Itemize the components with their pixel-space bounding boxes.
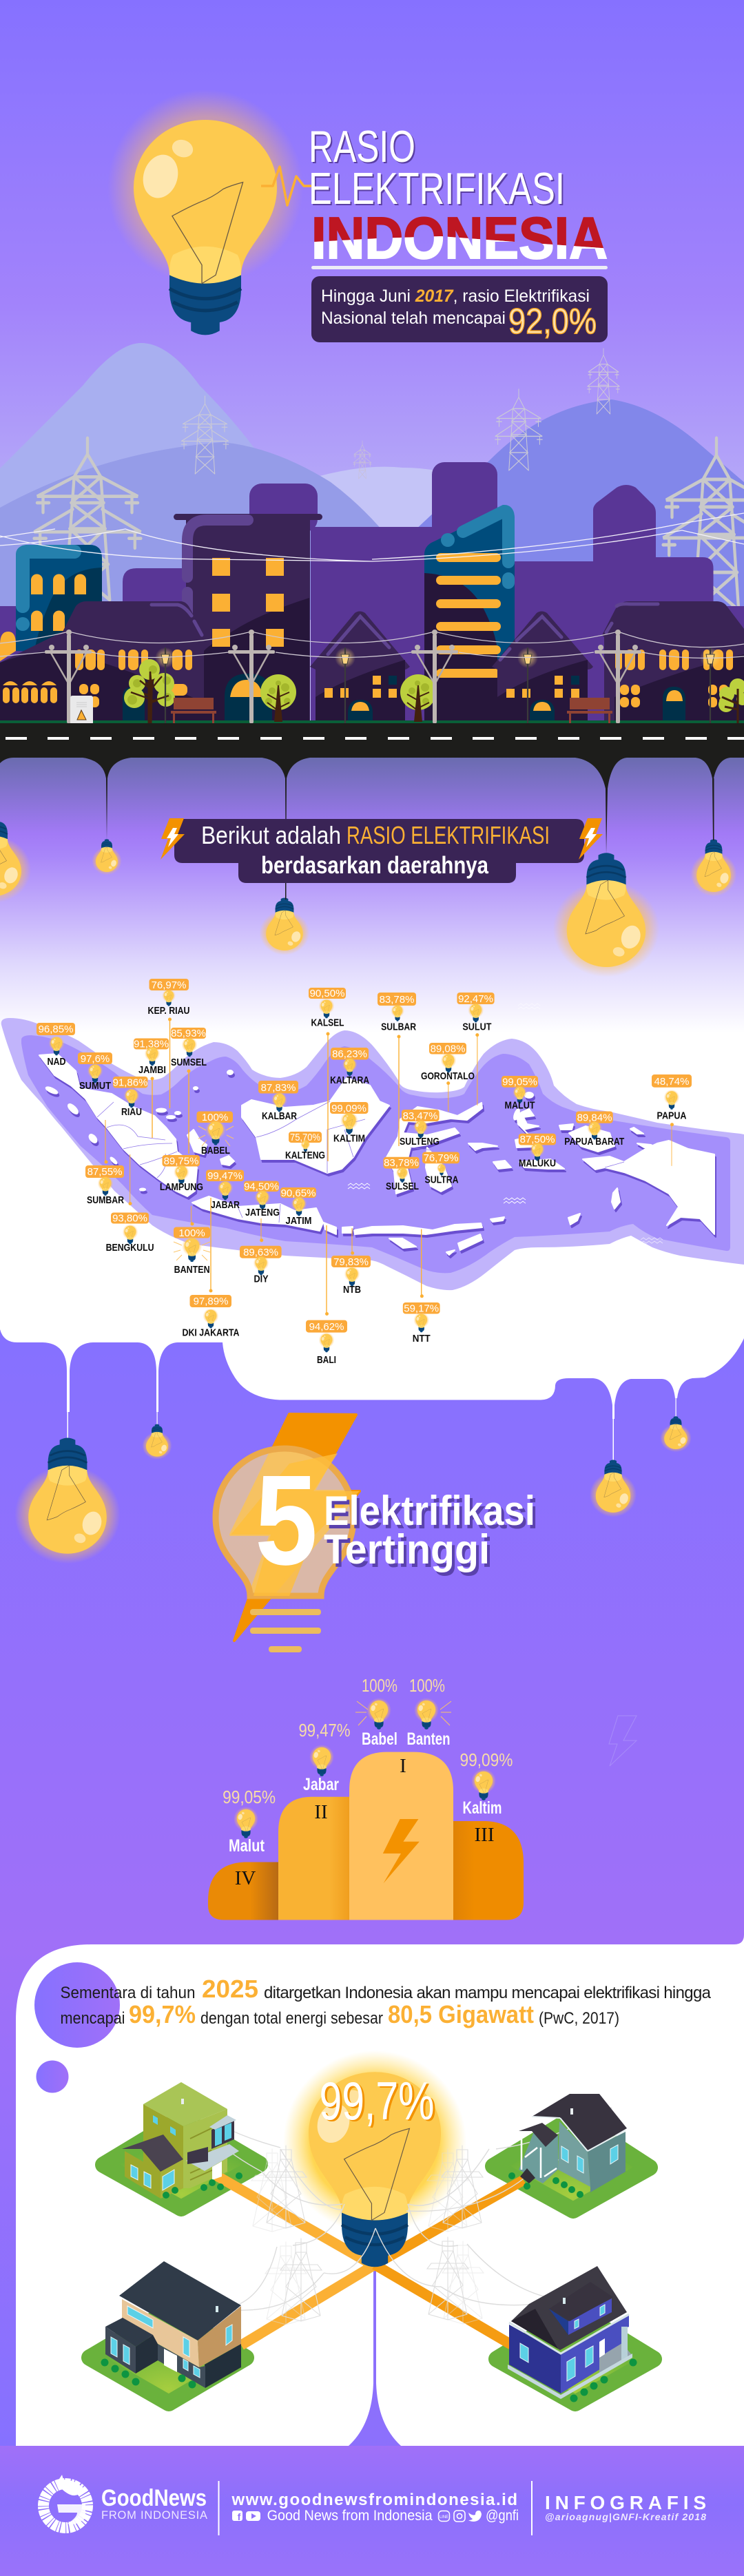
region: KEP. RIAU: KEP. RIAU <box>147 1005 190 1017</box>
footer: GoodNews wordmark: FROM INDONESIA <box>101 2509 207 2522</box>
decoration: thought circles <box>34 1962 120 2092</box>
region: JATIM: 90,65% <box>281 1187 316 1199</box>
street: high voltage wires <box>0 513 744 561</box>
region: SULBAR <box>378 993 416 1146</box>
region: PAPUA <box>652 1074 692 1166</box>
podium: Kaltim <box>460 1749 513 1818</box>
region: SULBAR: SULBAR <box>381 1021 416 1033</box>
pad: lawn top left <box>103 2118 260 2208</box>
heading: 5 elektrifikasi tertinggi: Tertinggi <box>324 1526 490 1572</box>
region: SULTENG: 83,47% <box>403 1110 437 1122</box>
towers and wires <box>183 2101 612 2325</box>
icon: instagram <box>454 2511 465 2522</box>
region: MALUT: 99,05% <box>502 1076 537 1088</box>
text: 2025 target: mencapai <box>61 2009 125 2028</box>
building: dark tower <box>174 514 322 723</box>
roads: cross to houses <box>216 2175 524 2345</box>
region: DKI JAKARTA: 97,89% <box>194 1296 228 1307</box>
connector: purple stalk <box>349 2261 401 2446</box>
house: green town house <box>122 2082 242 2199</box>
region: BABEL: 100% <box>202 1112 228 1123</box>
heading: 5 elektrifikasi tertinggi: Elektrifikasi <box>324 1488 535 1534</box>
panel: white target section <box>16 1944 744 2446</box>
street: electricity box <box>70 696 93 725</box>
podium: Babel: Babel <box>362 1730 397 1749</box>
callout: 2017 national ratio: Hingga Juni 2017, rasio Elektrifikasi <box>321 287 590 306</box>
region: SUMBAR: 87,55% <box>87 1166 122 1178</box>
podium: Banten: Banten <box>406 1730 451 1749</box>
text: 2025 target: 2025 <box>202 1975 258 2003</box>
region: SULSEL: 83,78% <box>384 1157 419 1169</box>
hanging bulbs: section 2 <box>0 778 736 977</box>
region: SULUT <box>457 993 495 1105</box>
section background: top five <box>0 1329 744 1944</box>
region: KEP. RIAU <box>147 979 190 1108</box>
heading: 5 elektrifikasi tertinggi <box>255 1449 535 1592</box>
icon: twitter <box>468 2511 482 2522</box>
region: KEP. RIAU: 76,97% <box>152 979 186 991</box>
region: KALTENG: 75,70% <box>290 1132 320 1143</box>
scene: purple skyline <box>0 462 744 727</box>
footer: infografis credit: @arioagnug|GNFI-Kreatif 2018 <box>545 2511 706 2522</box>
region: KALTIM: KALTIM <box>333 1132 365 1145</box>
region: BABEL: BABEL <box>201 1145 230 1156</box>
region: PAPUA: 48,74% <box>654 1076 689 1088</box>
region: DIY: DIY <box>254 1273 269 1285</box>
region: MALUT <box>502 1076 538 1112</box>
icon: line <box>438 2511 449 2521</box>
podium: Banten <box>406 1675 451 1749</box>
region: NAD <box>37 1023 75 1068</box>
region: LAMPUNG: LAMPUNG <box>160 1181 203 1193</box>
building: left teal block <box>0 545 102 661</box>
podium step I <box>349 1752 453 1920</box>
region: JAMBI <box>134 1039 169 1138</box>
region: NAD: NAD <box>47 1056 66 1068</box>
footer: GoodNews wordmark <box>101 2485 207 2522</box>
street: benches <box>171 698 612 724</box>
region: KALSEL: 90,50% <box>310 988 344 999</box>
footer: infografis credit: INFOGRAFIS <box>545 2492 706 2513</box>
footer: website and social: @gnfi <box>486 2508 519 2524</box>
region: SUMSEL <box>171 1028 207 1154</box>
icon: lightning right <box>579 818 603 860</box>
text: 2025 target: 80,5 Gigawatt <box>388 2000 534 2028</box>
banner: subtitle <box>174 819 584 883</box>
region: JABAR <box>206 1170 244 1211</box>
region: KALTENG <box>285 1132 325 1161</box>
region: JABAR: JABAR <box>211 1199 240 1211</box>
footer background <box>0 2446 744 2576</box>
region: BENGKULU: BENGKULU <box>106 1242 154 1254</box>
region: BANTEN: BANTEN <box>174 1264 210 1276</box>
region: RIAU: 91,86% <box>113 1077 147 1088</box>
text: 2025 target: 99,7% <box>129 2000 196 2028</box>
region: NTB: NTB <box>343 1284 361 1296</box>
region: GORONTALO: GORONTALO <box>421 1070 475 1082</box>
region: GORONTALO: 89,08% <box>431 1043 465 1055</box>
text: 2025 target: (PwC, 2017) <box>539 2009 619 2028</box>
region: JAMBI: JAMBI <box>138 1064 166 1076</box>
icon: lightning and bulb emblem <box>216 1414 360 1652</box>
region: MALUT: MALUT <box>504 1100 535 1112</box>
rank numerals: III <box>475 1824 494 1846</box>
text: 2025 target: Sementara di tahun <box>61 1984 196 2002</box>
region: NTT: NTT <box>413 1333 431 1344</box>
region: SULSEL <box>383 1157 420 1192</box>
pad: lawn bottom left <box>90 2311 246 2403</box>
region: JATIM: JATIM <box>285 1215 311 1227</box>
building: right teal tower <box>424 508 515 723</box>
street: street lamps <box>155 647 721 725</box>
region: SUMBAR <box>85 1120 124 1206</box>
region: SULTENG: SULTENG <box>400 1136 440 1147</box>
region: SUMBAR: SUMBAR <box>87 1194 124 1206</box>
callout: 2017 national ratio: Nasional telah mencapai <box>321 309 506 328</box>
banner: subtitle: Berikut adalah <box>201 821 341 849</box>
region: BANTEN: 100% <box>178 1227 205 1239</box>
heading: 5 elektrifikasi tertinggi: 5 <box>255 1449 318 1592</box>
podium: Jabar: Jabar <box>303 1775 339 1794</box>
podium: Babel <box>355 1675 397 1749</box>
region: JAMBI: 91,38% <box>134 1039 169 1050</box>
region: KALTARA: KALTARA <box>330 1074 369 1086</box>
banner: subtitle: berdasarkan daerahnya <box>261 852 488 879</box>
podium: Banten: 100% <box>409 1675 445 1696</box>
podium: Jabar <box>299 1720 350 1794</box>
region: SULTRA <box>422 1152 459 1186</box>
region: SULUT: SULUT <box>462 1021 491 1033</box>
street: trees <box>124 659 744 723</box>
icon: youtube <box>246 2511 260 2521</box>
region: KALSEL <box>309 988 346 1161</box>
region: PAPUA BARAT: 89,84% <box>577 1112 612 1124</box>
podium step IV <box>208 1862 278 1920</box>
house: dark roof tan house <box>101 2261 241 2389</box>
pad: lawn bottom right <box>497 2311 654 2403</box>
scene: mountains and pylons <box>0 343 744 620</box>
region: PAPUA: PAPUA <box>657 1110 687 1122</box>
illustration: hero light bulb <box>107 90 303 335</box>
region: KALTENG: KALTENG <box>285 1150 325 1161</box>
map labels <box>37 979 692 1366</box>
region: MALUKU: MALUKU <box>519 1157 556 1170</box>
region: LAMPUNG <box>160 1155 203 1193</box>
region: MALUKU <box>519 1134 556 1170</box>
region: KALTIM: 99,09% <box>331 1103 366 1114</box>
region: SUMSEL: SUMSEL <box>171 1057 207 1068</box>
icon: facebook <box>232 2511 242 2522</box>
region: PAPUA BARAT <box>564 1112 624 1147</box>
podium: Malut <box>223 1787 276 1856</box>
region: DIY: 89,63% <box>243 1247 278 1258</box>
callout: 2017 national ratio: 92,0% <box>508 302 597 342</box>
text: 99,7%: 99,7% <box>320 2070 434 2131</box>
title: RASIO <box>309 121 415 172</box>
region: NTT: 59,17% <box>404 1303 439 1314</box>
map: islands of Indonesia <box>39 1004 716 1258</box>
left edge strip <box>0 1944 96 2446</box>
icon: pulse line <box>261 167 311 205</box>
region: NAD: 96,85% <box>39 1024 73 1035</box>
region: RIAU <box>113 1077 147 1118</box>
background: sky <box>0 0 744 758</box>
region: BABEL <box>197 1112 234 1156</box>
house: blue house <box>508 2266 637 2402</box>
rank numerals: II <box>314 1801 328 1823</box>
title: ELEKTRIFIKASI <box>309 163 565 214</box>
icon: lightning left <box>161 818 185 860</box>
callout: 2017 national ratio <box>311 276 608 342</box>
rank numerals: IV <box>235 1867 256 1889</box>
region: SULUT: 92,47% <box>458 993 493 1005</box>
region: DIY <box>240 1218 282 1285</box>
region: KALBAR <box>258 1081 298 1122</box>
title <box>309 121 608 271</box>
region: MALUKU: 87,50% <box>520 1134 555 1145</box>
podium: Kaltim: 99,09% <box>460 1749 513 1770</box>
title: INDONESIA <box>311 206 608 271</box>
hanging bulbs: section 3 <box>14 1378 692 1564</box>
region: SUMUT: SUMUT <box>79 1080 111 1092</box>
region: JATENG <box>244 1181 280 1218</box>
podium step II <box>278 1797 351 1920</box>
region: KALBAR: KALBAR <box>262 1110 297 1122</box>
house: right row house <box>602 601 744 723</box>
region: BALI: 94,62% <box>309 1321 344 1333</box>
icon: line: LINE <box>440 2515 448 2520</box>
podium: Malut: Malut <box>229 1836 265 1856</box>
region: SULSEL: SULSEL <box>386 1181 419 1192</box>
chart: podium <box>208 1752 524 1920</box>
house: left row house <box>0 601 272 723</box>
street: ground strip <box>0 720 744 725</box>
region: SUMSEL: 85,93% <box>171 1028 206 1039</box>
map: sea halo <box>1 1018 744 1290</box>
illustration: center glowing bulb <box>283 2050 466 2267</box>
text: 2025 target: ditargetkan Indonesia akan mampu mencapai elektrifikasi hingga <box>264 1984 712 2002</box>
footer: divider two <box>531 2481 533 2535</box>
region: SUMUT <box>78 1052 112 1092</box>
podium: Malut: 99,05% <box>223 1787 276 1807</box>
region: KALSEL: KALSEL <box>311 1017 344 1029</box>
region: BENGKULU: 93,80% <box>112 1212 147 1225</box>
podium: Kaltim: Kaltim <box>463 1798 502 1818</box>
region: SULBAR: 83,78% <box>380 994 414 1006</box>
footer: divider one <box>218 2481 219 2535</box>
podium: Babel: 100% <box>362 1675 397 1696</box>
house: teal wooden house <box>508 2094 627 2198</box>
region: JATIM <box>280 1187 316 1227</box>
podium: Jabar: 99,47% <box>299 1720 350 1741</box>
region: SULTENG <box>400 1110 440 1147</box>
region: GORONTALO <box>421 1043 475 1112</box>
region: BALI <box>306 1225 347 1366</box>
rank numerals <box>235 1755 494 1889</box>
region: PAPUA BARAT: PAPUA BARAT <box>564 1136 624 1147</box>
region: JATENG: JATENG <box>245 1207 280 1218</box>
icon: facebook: f <box>238 2511 241 2522</box>
footer: website and social: Good News from Indonesia <box>267 2508 433 2524</box>
footer: GoodNews wordmark: GoodNews <box>101 2485 207 2511</box>
region: LAMPUNG: 89,75% <box>164 1156 198 1167</box>
rank numerals: I <box>400 1755 406 1777</box>
region: SULTRA: SULTRA <box>424 1174 459 1186</box>
region: SULTRA: 76,79% <box>424 1152 458 1164</box>
text: 2025 target: dengan total energi sebesar <box>200 2009 383 2028</box>
title: INDONESIA <box>311 206 608 271</box>
region: KALTARA <box>330 1048 369 1086</box>
section background: road and drips <box>0 723 744 1033</box>
pad: lawn top right <box>493 2118 650 2210</box>
region: JABAR: 99,47% <box>207 1170 242 1182</box>
region: JATENG: 94,50% <box>244 1181 279 1193</box>
icon: podium lightning <box>383 1819 420 1883</box>
footer: website and social: www.goodnewsfromindonesia.id <box>231 2491 517 2509</box>
region: KALBAR: 87,83% <box>261 1082 296 1094</box>
region: NTT <box>403 1229 440 1344</box>
region: DKI JAKARTA: DKI JAKARTA <box>182 1327 240 1339</box>
footer: website and social <box>231 2491 519 2524</box>
house: small gabled house 2 <box>492 612 593 723</box>
region: RIAU: RIAU <box>121 1106 142 1118</box>
text: 2025 target <box>61 1975 712 2028</box>
house: small gabled house 1 <box>310 612 410 723</box>
region: KALTIM <box>330 1102 368 1145</box>
region: NTB <box>331 1228 371 1296</box>
banner: subtitle: RASIO ELEKTRIFIKASI <box>347 821 550 849</box>
decoration: rounded purple lip <box>734 1935 744 1944</box>
podium labels <box>223 1675 513 1856</box>
region: KALTARA: 86,23% <box>332 1048 367 1060</box>
region: DKI JAKARTA <box>182 1198 240 1339</box>
region: NTB: 79,83% <box>333 1256 369 1268</box>
footer: logo mark <box>43 2475 87 2528</box>
podium step III <box>453 1821 524 1920</box>
region: BALI: BALI <box>317 1354 336 1366</box>
street: electric poles and low wires <box>0 630 744 724</box>
icon: faint lightning <box>609 1716 637 1766</box>
region: SUMUT: 97,6% <box>81 1053 110 1065</box>
region: BENGKULU <box>106 1154 154 1254</box>
region: BANTEN <box>174 1206 210 1276</box>
